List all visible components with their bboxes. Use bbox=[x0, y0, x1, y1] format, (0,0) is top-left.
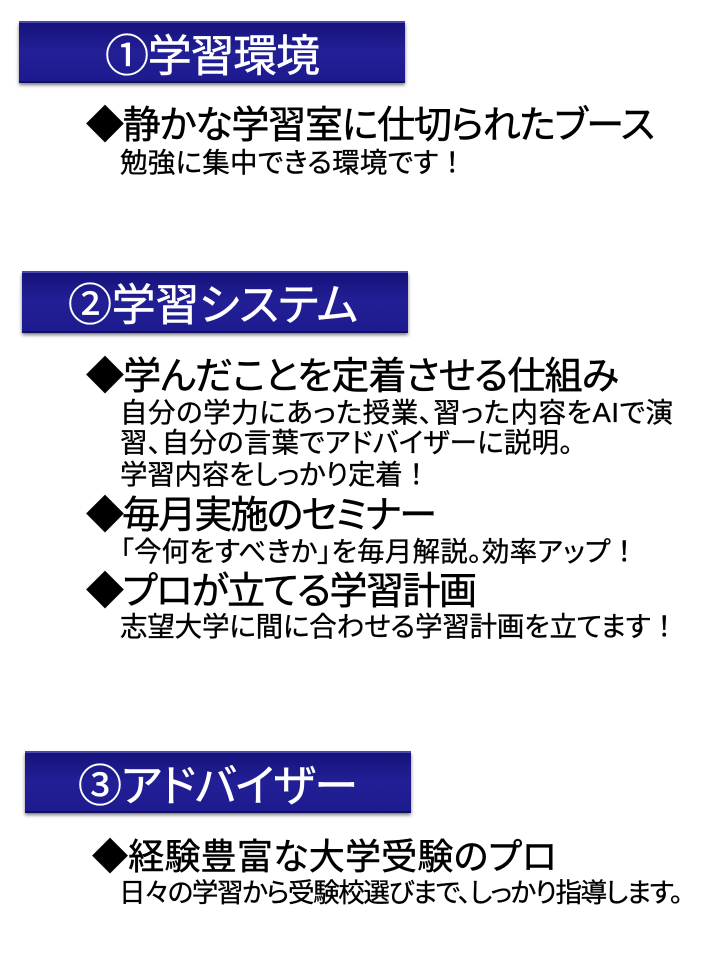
banner: 学習システム bbox=[22, 271, 408, 335]
text: environment description: 勉強に集中できる環境です！ bbox=[120, 147, 466, 178]
section 2: learning system bbox=[22, 271, 678, 642]
text: seminar description: 「今何をすべきか」を毎月解説。効率アップ！ bbox=[120, 536, 638, 567]
text: retention description: 学習内容をしっかり定着！ bbox=[120, 459, 430, 490]
banner: 学習環境 bbox=[19, 21, 405, 85]
heading: mechanism for retention: ◆学んだことを定着させる仕組み bbox=[86, 356, 619, 398]
banner: 学習システム: ②学習システム bbox=[68, 281, 358, 330]
text: retention description: 習、自分の言葉でアドバイザーに説明。 bbox=[120, 427, 573, 458]
banner: アドバイザー bbox=[25, 751, 411, 815]
text: study plan description: 志望大学に間に合わせる学習計画を立てます！ bbox=[120, 611, 678, 642]
banner: 学習環境: ①学習環境 bbox=[105, 32, 320, 81]
heading: quiet booths: ◆静かな学習室に仕切られたブース bbox=[86, 105, 655, 147]
section 1: learning environment bbox=[19, 21, 655, 178]
banner: アドバイザー: ③アドバイザー bbox=[78, 762, 358, 811]
text: retention description bbox=[120, 397, 673, 490]
section 3: advisers bbox=[25, 751, 683, 908]
heading: monthly seminar: ◆毎月実施のセミナー bbox=[86, 495, 437, 537]
heading: study plan by professionals: ◆プロが立てる学習計画 bbox=[86, 571, 477, 613]
heading: experienced professionals: ◆経験豊富な大学受験のプロ bbox=[92, 836, 557, 877]
text: adviser description: 日々の学習から受験校選びまで、しっかり指導します。 bbox=[119, 878, 683, 908]
text: retention description: 自分の学力にあった授業、習った内容をAIで演 bbox=[120, 397, 673, 428]
